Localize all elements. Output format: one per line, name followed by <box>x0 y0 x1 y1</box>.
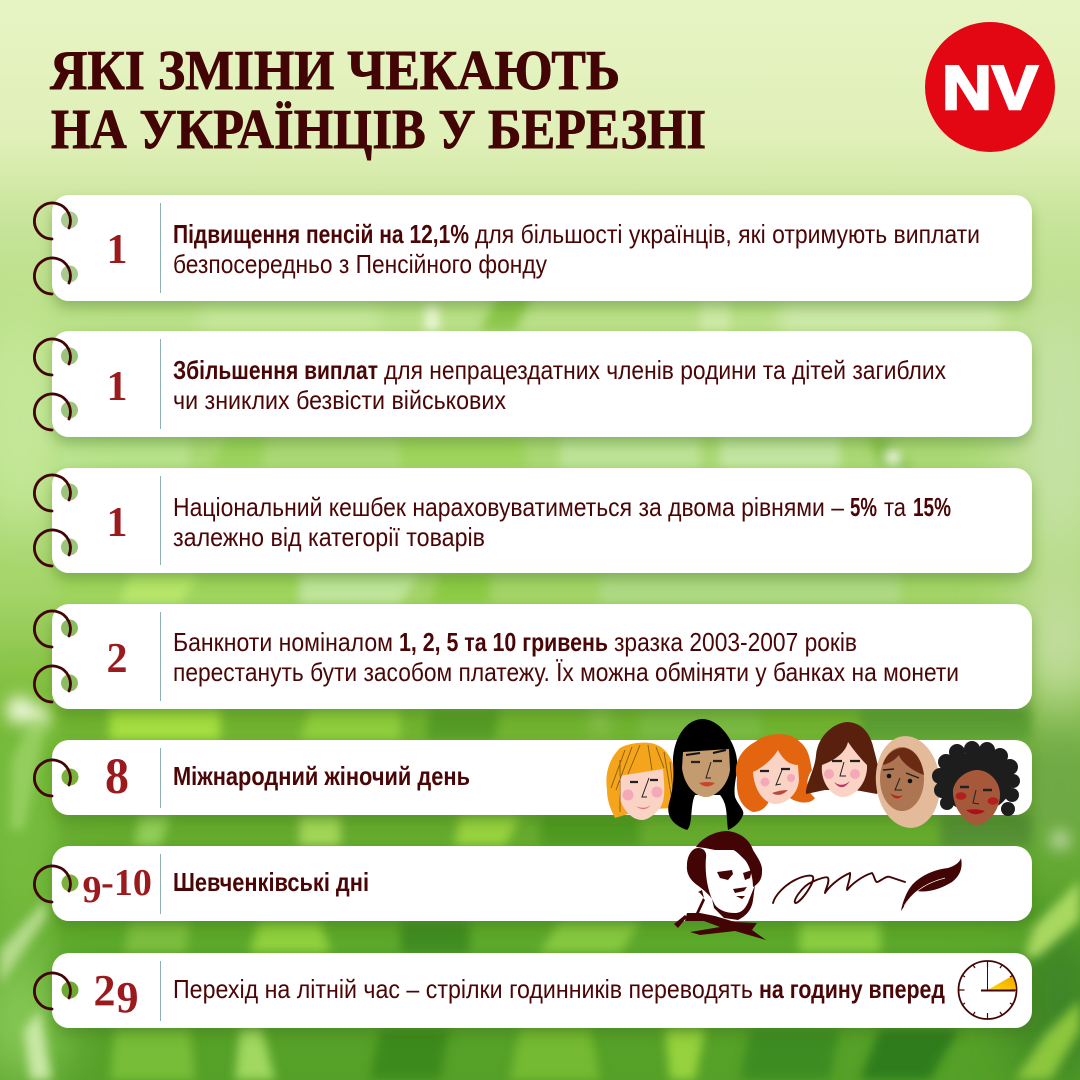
gap 6 <box>60 921 1032 953</box>
icon: quill feather <box>901 858 962 911</box>
logo: NV: NV <box>942 54 1038 123</box>
gap 2 <box>210 437 265 468</box>
panel: national cashback: залежно від категорії товарів <box>173 522 485 552</box>
panel: national cashback: 1 <box>106 500 128 546</box>
icon: woman with long black hair <box>668 719 743 830</box>
panel: family payments: Збільшення виплат <box>173 355 378 385</box>
icon: signature <box>773 873 905 903</box>
panel: daylight saving time <box>34 953 1032 1028</box>
panel: pension increase: безпосередньо з Пенсійного фонду <box>173 249 547 279</box>
panel: family payments: чи зниклих безвісти військових <box>173 385 506 415</box>
title: НА УКРАЇНЦІВ У БЕРЕЗНІ <box>51 99 706 161</box>
icon: woman with blonde bob <box>606 743 677 820</box>
gap 1 <box>480 290 535 331</box>
panel: daylight saving time: 2 <box>94 966 116 1015</box>
panel: pension increase: 1 <box>106 227 128 273</box>
panel: women's day <box>34 740 1032 815</box>
panel: pension increase <box>34 195 1032 301</box>
panel: family payments <box>34 331 1032 437</box>
panel: family payments: 1 <box>106 364 128 410</box>
icon: woman with curly red hair <box>736 734 815 812</box>
logo: NV <box>925 22 1055 152</box>
panel: banknotes <box>34 604 1032 709</box>
icon: woman with black curly hair <box>932 741 1020 825</box>
gap 4 <box>60 709 1032 740</box>
panel: pension increase: для більшості українців, які отримують виплати <box>475 219 980 249</box>
panel: Shevchenko days <box>34 846 1032 921</box>
title: ЯКІ ЗМІНИ ЧЕКАЮТЬ <box>50 40 620 102</box>
gap 3 <box>60 573 300 604</box>
icon: clock <box>958 961 1016 1019</box>
title <box>50 40 706 161</box>
panel: daylight saving time: на годину вперед <box>759 974 945 1004</box>
panel: daylight saving time: Перехід на літній час – стрілки годинників переводять <box>173 974 753 1004</box>
panel: pension increase: Підвищення пенсій на 12,1% <box>173 219 469 249</box>
icon: Shevchenko portrait <box>674 831 766 940</box>
sides <box>1025 880 1080 960</box>
panel: banknotes: 1, 2, 5 та 10 гривень <box>399 627 608 657</box>
panel: national cashback <box>34 468 1032 573</box>
panel: banknotes: 2 <box>106 636 128 682</box>
icon: woman in beige headscarf <box>871 733 945 831</box>
icon: six women's faces <box>606 719 1020 831</box>
panel: Shevchenko days: 9 <box>82 869 102 911</box>
bottom <box>110 1028 195 1080</box>
icon: woman with brown hair <box>806 722 879 797</box>
panel: national cashback: 5% <box>850 492 877 522</box>
panel: daylight saving time: 9 <box>116 973 138 1022</box>
panel: national cashback: та <box>884 492 906 522</box>
gap 5 <box>60 815 1032 846</box>
panel: banknotes: перестануть бути засобом платежу. Їх можна обміняти у банках на монети <box>173 657 959 687</box>
panel: banknotes: зразка 2003-2007 років <box>614 627 857 657</box>
panel: women's day: 8 <box>105 749 129 805</box>
panel: family payments: для непрацездатних членів родини та дітей загиблих <box>384 355 946 385</box>
panel: Shevchenko days: -10 <box>101 862 152 904</box>
panel: women's day: Міжнародний жіночий день <box>173 761 470 791</box>
panel: Shevchenko days: Шевченківські дні <box>173 867 369 897</box>
panel: banknotes: Банкноти номіналом <box>173 627 393 657</box>
panel: national cashback: 15% <box>913 492 951 522</box>
panel: national cashback: Національний кешбек нараховуватиметься за двома рівнями – <box>173 492 844 522</box>
